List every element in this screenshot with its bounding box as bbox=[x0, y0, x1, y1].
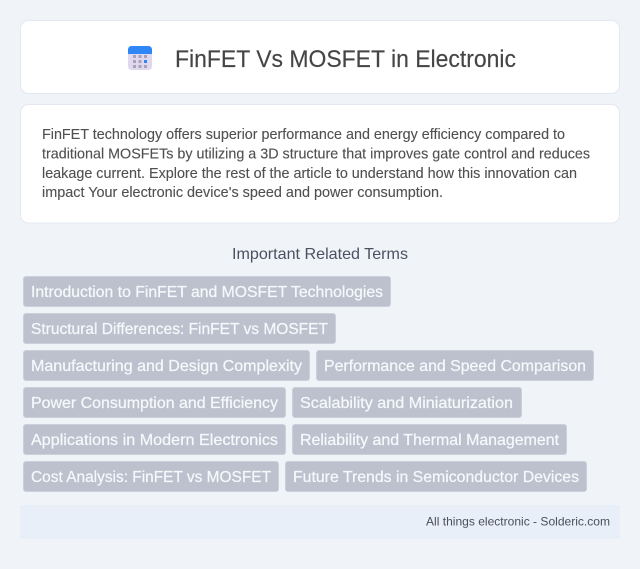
tag: Reliability and Thermal Management bbox=[300, 432, 560, 449]
heading: important related terms: Important Related Terms bbox=[232, 246, 408, 263]
tag bbox=[24, 424, 286, 454]
tag bbox=[286, 462, 586, 492]
tag: Structural Differences: FinFET vs MOSFET bbox=[31, 321, 328, 338]
text block: description: impact Your electronic device's speed and power consumption. bbox=[42, 185, 443, 201]
tag bbox=[292, 388, 522, 418]
tag bbox=[24, 388, 286, 418]
footer band bbox=[20, 505, 620, 539]
tag: Applications in Modern Electronics bbox=[31, 432, 278, 449]
tag: Scalability and Miniaturization bbox=[300, 395, 513, 412]
tag bbox=[24, 350, 310, 380]
tag bbox=[24, 314, 336, 344]
icon: calendar bbox=[128, 46, 152, 70]
panel: title card bbox=[20, 20, 620, 94]
tag: Cost Analysis: FinFET vs MOSFET bbox=[31, 469, 271, 486]
tag bbox=[292, 424, 566, 454]
footer text: All things electronic - Solderic.com bbox=[426, 514, 610, 528]
tag bbox=[316, 350, 594, 380]
text block: description: traditional MOSFETs by utilizing a 3D structure that improves gate control and reduces bbox=[42, 146, 590, 162]
tag bbox=[24, 462, 278, 492]
tag: Manufacturing and Design Complexity bbox=[31, 358, 302, 375]
tag: Power Consumption and Efficiency bbox=[31, 395, 278, 412]
panel: related terms tags bbox=[24, 276, 594, 492]
tag: Performance and Speed Comparison bbox=[324, 358, 586, 375]
tag: Introduction to FinFET and MOSFET Technologies bbox=[31, 284, 383, 301]
tag: Future Trends in Semiconductor Devices bbox=[293, 469, 579, 486]
panel: description bbox=[20, 104, 620, 223]
title: FinFET Vs MOSFET in Electronic bbox=[175, 46, 516, 73]
text block: description: leakage current. Explore the rest of the article to understand how this innovation can bbox=[42, 166, 577, 182]
tag bbox=[24, 276, 390, 306]
text block: description: FinFET technology offers superior performance and energy efficiency compared to bbox=[42, 127, 565, 143]
text block: description bbox=[42, 127, 590, 201]
